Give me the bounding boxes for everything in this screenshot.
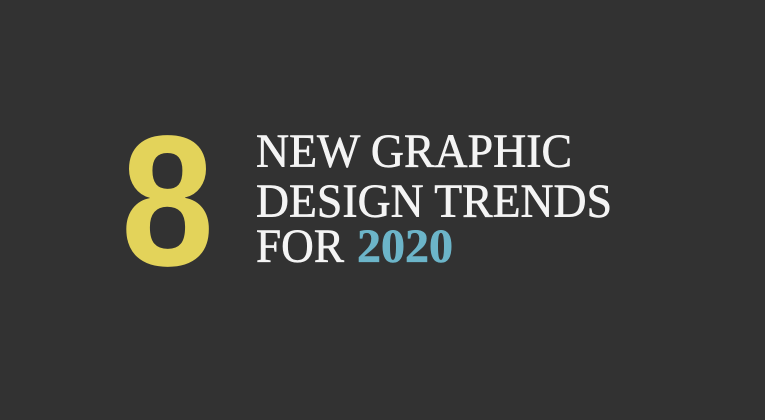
year 2020: 2020 [357,220,453,273]
title line 1: NEW GRAPHIC [256,125,572,178]
title line 3 [256,220,453,273]
title line 3: FOR [256,220,344,273]
big number 8: 8 [121,98,214,305]
title line 2: DESIGN TRENDS [256,175,612,228]
title [256,125,612,273]
